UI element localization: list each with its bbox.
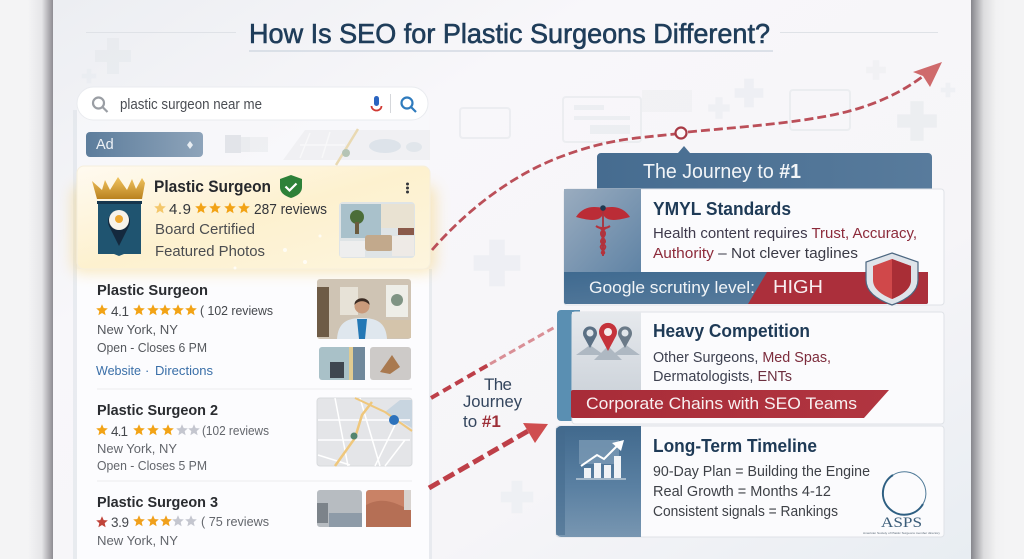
- listing 2 rating: [96, 423, 269, 439]
- listing 3 location: New York, NY: [97, 533, 178, 548]
- icon: location pin banner: [97, 201, 142, 256]
- journey label: to #1: [463, 412, 501, 431]
- icon: menu dots: [406, 182, 409, 194]
- logo: ASPS: [863, 472, 941, 535]
- heading tab: the journey: [597, 146, 932, 192]
- heading tab: the journey: The Journey to #1: [643, 161, 801, 183]
- icon: blue search: [402, 98, 416, 112]
- logo: ASPS: American Society of Plastic Surgeons member directory: [863, 531, 941, 535]
- scrutiny bar: Google scrutiny level:: [589, 278, 755, 297]
- featured listing card: [77, 166, 430, 270]
- listing 2: [96, 398, 412, 473]
- rating row: [154, 201, 327, 218]
- photo: procedure detail: [370, 347, 411, 380]
- listing 1 name: Plastic Surgeon: [97, 282, 208, 299]
- icon: gold crown: [92, 177, 145, 199]
- listing 3 rating: ( 75 reviews: [201, 514, 269, 529]
- panel: heavy competition: [557, 310, 944, 424]
- icon: caduceus: [576, 205, 630, 256]
- listing 3 rating: 3.9: [111, 515, 129, 530]
- panel: YMYL standards: [564, 189, 944, 305]
- icon: three map pins: [576, 323, 640, 360]
- red banner: Corporate Chains with SEO Teams: [586, 394, 857, 413]
- listing 1 links: Website: [96, 363, 141, 378]
- timeline plan lines: Consistent signals = Rankings: [653, 504, 838, 520]
- photo: surgeon portrait: [317, 279, 411, 339]
- photo: skin close-up: [366, 490, 411, 527]
- timeline heading: Long-Term Timeline: [653, 436, 817, 456]
- listing 1 links: ·: [145, 363, 149, 378]
- competition description: Other Surgeons, Med Spas,: [653, 350, 831, 366]
- red banner: [571, 390, 889, 418]
- panel: search results: [73, 105, 432, 559]
- YMYL description: [653, 225, 917, 262]
- scrutiny bar: HIGH: [773, 277, 823, 297]
- listing 1 rating: 4.1: [111, 304, 129, 319]
- ad pill: [86, 132, 203, 157]
- listing 1 rating: ( 102 reviews: [200, 303, 273, 318]
- journey label: The: [484, 375, 512, 394]
- arrow: middle dashed path: [431, 327, 555, 398]
- listing name: Plastic Surgeon: [154, 178, 271, 196]
- listing 3: [96, 490, 411, 548]
- listing 2 rating: (102 reviews: [202, 423, 269, 438]
- listing 1: [96, 279, 411, 380]
- icon: search magnifier: [93, 98, 108, 112]
- listing 3 rating: [96, 514, 269, 530]
- photo: recovery room: [317, 490, 362, 527]
- featured photos: Featured Photos: [155, 243, 265, 260]
- journey label: Journey: [463, 392, 522, 411]
- listing 1 rating: [96, 303, 273, 319]
- map thumbnail: [317, 398, 412, 466]
- search query: plastic surgeon near me: [120, 97, 262, 113]
- competition heading: Heavy Competition: [653, 321, 810, 341]
- photo: clinic lounge: [339, 202, 415, 258]
- listing 1 links: [96, 363, 214, 378]
- icon: red shield: [866, 253, 918, 305]
- golden glow: [72, 185, 436, 273]
- YMYL description: Health content requires Trust, Accuracy,: [653, 225, 917, 242]
- timeline plan lines: Real Growth = Months 4-12: [653, 484, 831, 500]
- competition description: Dermatologists, ENTs: [653, 369, 792, 385]
- ad pill: Ad: [96, 137, 114, 153]
- journey label: [463, 375, 522, 431]
- faded map strip: [225, 129, 430, 165]
- arrow: upward journey path: [432, 62, 942, 250]
- YMYL heading: YMYL Standards: [653, 199, 791, 219]
- competition description: [653, 350, 831, 385]
- YMYL description: Authority – Not clever taglines: [653, 245, 858, 262]
- timeline plan lines: 90-Day Plan = Building the Engine: [653, 464, 870, 480]
- listing 1 location: New York, NY: [97, 322, 178, 337]
- icon: verified shield: [280, 175, 302, 198]
- timeline plan lines: [653, 464, 870, 520]
- listing 2 location: New York, NY: [97, 441, 177, 456]
- logo: ASPS: ASPS: [881, 515, 922, 531]
- icon: microphone: [372, 96, 382, 110]
- listing 1 links: Directions: [155, 363, 214, 378]
- listing 2 name: Plastic Surgeon 2: [97, 402, 218, 419]
- title: How Is SEO for Plastic Surgeons Different?: [249, 18, 770, 49]
- scrutiny bar: [564, 272, 928, 304]
- sparkles: [234, 234, 322, 270]
- decorative medical background icons: [82, 38, 955, 513]
- photo: treatment room: [319, 347, 365, 380]
- rating row: 4.9: [169, 201, 191, 218]
- panel: long-term timeline: [556, 426, 944, 537]
- listing 1 hours: Open - Closes 6 PM: [97, 340, 207, 355]
- listing 2 hours: Open - Closes 5 PM: [97, 458, 207, 473]
- rating row: 287 reviews: [254, 202, 327, 218]
- listing 2 rating: 4.1: [111, 424, 128, 439]
- board certified: Board Certified: [155, 221, 255, 238]
- listing 3 name: Plastic Surgeon 3: [97, 494, 218, 511]
- arrow: lower dashed path: [429, 423, 548, 488]
- search bar: [77, 87, 428, 120]
- icon: growth chart: [576, 440, 626, 480]
